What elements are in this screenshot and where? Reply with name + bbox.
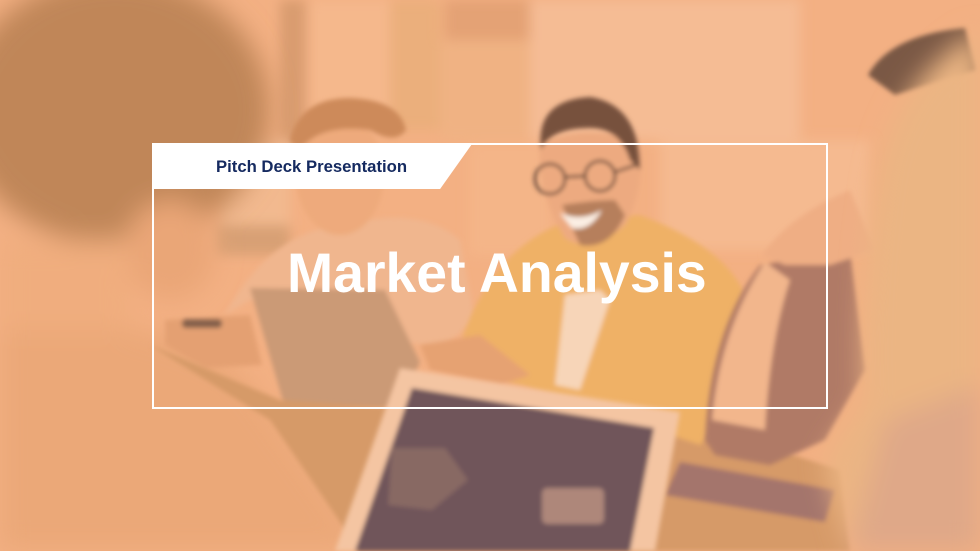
blurred foreground blonde person, right [825, 30, 980, 551]
table [150, 345, 850, 551]
blurred foreground head, left [0, 0, 370, 551]
title: Market Analysis [287, 242, 707, 304]
tablet in foreground [335, 368, 680, 551]
left seated person [165, 98, 475, 408]
right seated person [705, 28, 975, 465]
ribbon text: Pitch Deck Presentation [216, 157, 407, 176]
central man [420, 97, 743, 445]
heading ribbon [153, 144, 472, 189]
white outline frame [152, 143, 828, 409]
